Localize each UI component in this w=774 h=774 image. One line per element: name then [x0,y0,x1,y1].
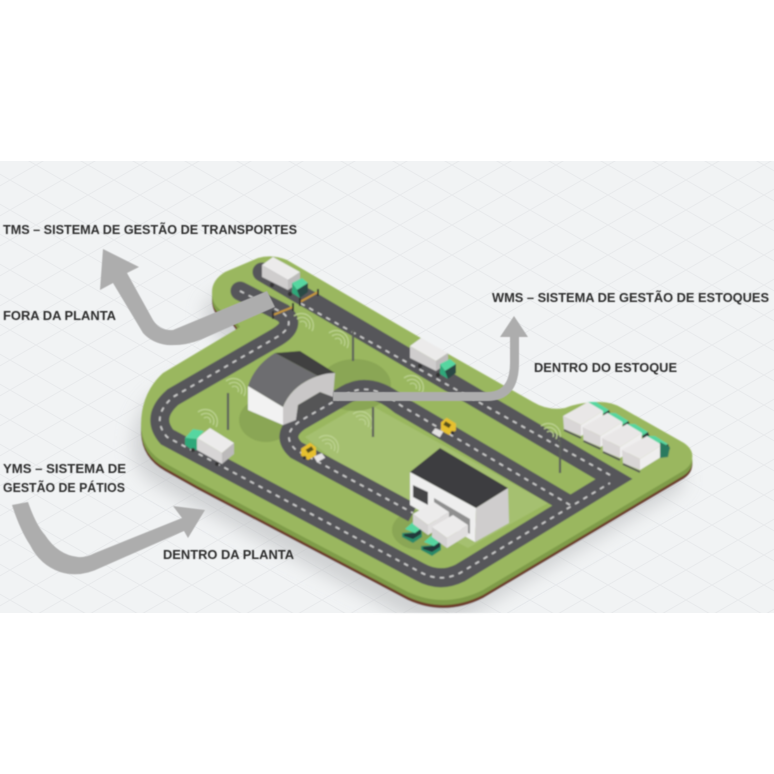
label: TMS: TMS – SISTEMA DE GESTÃO DE TRANSPORTES [3,222,297,237]
road network [160,272,614,578]
background panel with isometric grid [0,161,774,613]
label: YMS [3,462,126,495]
platform base [141,256,692,608]
arrow: YMS inside the plant [12,502,205,574]
isometric yard platform [133,256,692,622]
hangar building [248,351,335,425]
warehouse building [410,448,509,542]
truck on left road [185,428,234,466]
parked trucks [563,402,670,472]
wifi signals [198,313,560,453]
truck at top gate [262,257,308,298]
labels [3,222,769,562]
inner fields [239,359,548,550]
label: WMS: WMS – SISTEMA DE GESTÃO DE ESTOQUES [492,290,769,305]
arrow: WMS inside the warehouse [333,316,528,401]
antenna poles [228,330,560,473]
forklifts [301,418,456,462]
label: YMS: GESTÃO DE PÁTIOS [3,480,125,495]
label: inside the plant: DENTRO DA PLANTA [163,548,294,562]
platform shadow [133,278,684,622]
truck on upper road [410,338,456,379]
gate barriers [273,289,318,319]
label: YMS: YMS – SISTEMA DE [3,462,126,476]
label: inside the warehouse: DENTRO DO ESTOQUE [534,361,677,375]
label: outside the plant: FORA DA PLANTA [3,309,116,323]
arrow: TMS outside the plant [100,249,275,345]
docked trucks [402,502,468,556]
